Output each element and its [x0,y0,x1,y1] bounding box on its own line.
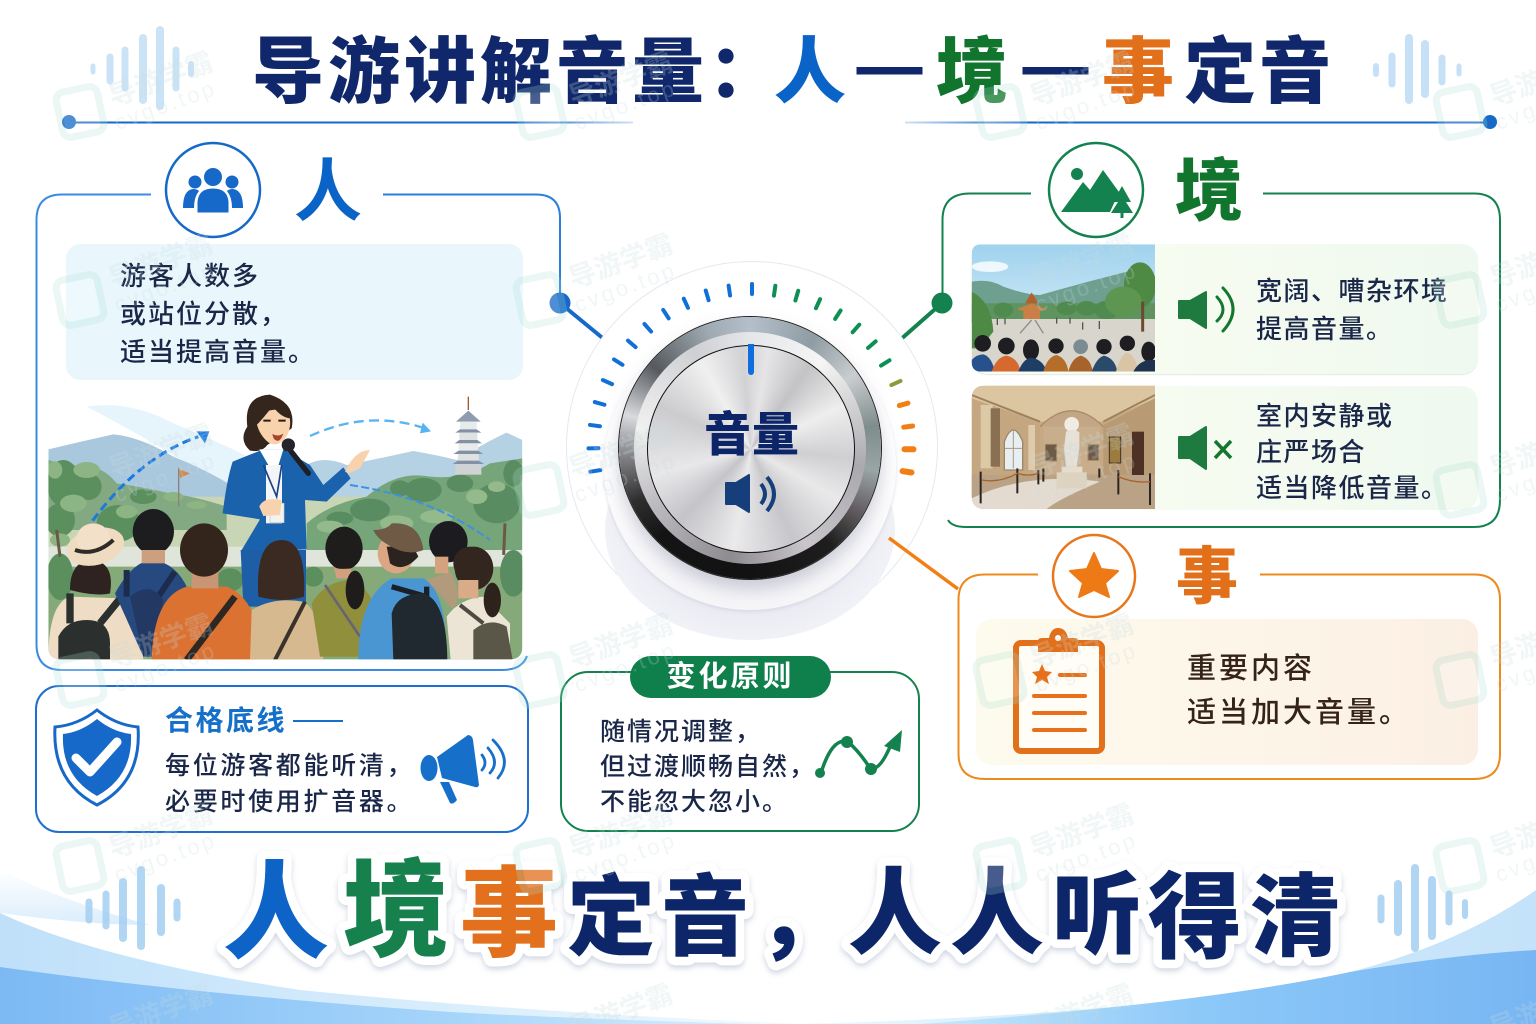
watermark: cvgo.top [571,827,680,887]
body text: 变化原则: 不能忽大忽小。 [600,788,789,816]
footer slogan: 定 [567,868,655,967]
watermark: 导游学霸 [105,609,217,674]
pagoda [453,397,484,475]
title [252,29,1334,113]
title: — [857,29,922,102]
knob inner ring [634,332,866,564]
dial: volume knob [566,261,938,640]
watermark: cvgo.top [571,75,680,135]
title: 导游讲解音量： [252,33,784,113]
panel: 合格底线 [35,685,529,833]
watermark: 导游学霸 [105,419,217,484]
footer slogan: 得 [1148,865,1242,970]
body text: 合格底线 [165,752,414,816]
watermark: 导游学霸 [1026,47,1138,112]
body text: 室内安静: 适当降低音量。 [1256,473,1449,503]
image: museum hall scene [972,386,1155,509]
footer slogan: 人 [848,861,942,966]
title: — [1023,29,1088,102]
icon: people group [164,142,262,238]
watermark: 导游学霸 [105,47,217,112]
footer slogan: 人 [950,861,1044,966]
knob label: 音量 [704,408,800,461]
heading: 合格底线: 合格底线 [165,705,287,736]
watermark: 导游学霸 [1026,229,1138,294]
icon: megaphone [420,735,506,804]
icon: knob speaker [725,474,776,513]
body text: 宽阔嘈杂环境: 宽阔、嘈杂环境 [1256,276,1449,306]
row card: 室内安静 [971,386,1478,510]
panel frame: 人 [36,194,603,671]
icon: star [1052,534,1136,618]
watermark: cvgo.top [111,827,220,887]
footer slogan: 听 [1052,866,1142,966]
watermark: 导游学霸 [565,229,677,294]
panel: 变化原则 [560,671,920,832]
dial far shadow [605,420,895,640]
body text: 人: 或站位分散， [120,299,288,329]
heading rule [293,720,343,722]
footer slogan: ， [757,868,845,967]
body text: 变化原则: 随情况调整， [600,718,762,746]
footer slogan: 境 [343,853,449,971]
body text: 宽阔嘈杂环境 [1256,276,1449,344]
watermark: cvgo.top [111,75,220,135]
panel frame: 境 [901,192,1501,528]
icon: mountains [1048,142,1144,238]
watermark: 导游学霸 [1026,419,1138,484]
dial near plate [604,322,896,610]
knob metal face [647,345,855,553]
dial halo [566,261,938,633]
icon: clipboard [1013,628,1105,754]
watermark: cvgo.top [1032,257,1141,317]
watermark: 导游学霸 [565,47,677,112]
panel frame: 事 [958,574,1501,780]
icon: speaker muted [1178,426,1232,470]
body text: 人: 适当提高音量。 [120,337,316,367]
body text: 人 [120,261,316,367]
body text: 人: 游客人数多 [120,261,260,291]
watermark: cvgo.top [1032,75,1141,135]
badge: 变化原则: 变化原则 [666,661,794,693]
watermark: cvgo.top [1032,637,1141,697]
heading: 人: 人 [294,154,362,230]
body text: 宽阔嘈杂环境: 提高音量。 [1256,314,1394,344]
guide [243,395,292,451]
body text: 室内安静: 庄严场合 [1256,437,1366,467]
watermark: 导游学霸 [1026,799,1138,864]
watermark: 导游学霸 [105,229,217,294]
tourists [48,597,143,660]
body text: 事 [1187,653,1411,729]
body text: 变化原则: 但过渡顺畅自然， [600,753,816,781]
title: 事 [1102,33,1174,113]
watermark: 导游学霸 [565,799,677,864]
body text: 室内安静: 室内安静或 [1256,401,1394,431]
footer slogan: 清 [1250,868,1340,968]
flag [178,467,180,507]
watermark: cvgo.top [111,447,220,507]
watermark: cvgo.top [111,257,220,317]
footer slogan: 音 [661,868,749,967]
image: open square scene [972,244,1155,372]
icon: trend line [815,730,902,778]
text card: 人 [66,244,523,380]
watermark: 导游学霸 [565,419,677,484]
illustration: guide and tourists [48,394,522,660]
body text: 事: 适当加大音量。 [1187,697,1411,729]
title: 人 [774,33,846,113]
watermark: cvgo.top [1032,827,1141,887]
watermark: cvgo.top [1032,447,1141,507]
footer slogan: 事 [460,859,558,969]
watermark: 导游学霸 [105,799,217,864]
dashed arrows [93,437,198,521]
panel: 境 [901,142,1501,528]
body text: 合格底线: 每位游客都能听清， [165,752,414,780]
watermark: cvgo.top [111,637,220,697]
knob outer ring [619,317,881,579]
text card: 事 [976,619,1478,765]
body text: 室内安静 [1256,401,1449,503]
watermark: cvgo.top [571,257,680,317]
title: 境 [936,33,1008,113]
row card: 宽阔嘈杂环境 [971,244,1478,374]
badge: 变化原则 [630,656,831,698]
footer slogan: 人 [223,855,329,973]
panel: 人 [36,142,603,671]
title: 定音 [1184,33,1334,113]
watermark: cvgo.top [571,637,680,697]
watermark: 导游学霸 [1026,609,1138,674]
watermark: cvgo.top [571,447,680,507]
body text: 事: 重要内容 [1187,653,1315,685]
heading: 事: 事 [1176,543,1238,612]
knob indicator [748,344,754,375]
heading: 境: 境 [1175,154,1243,230]
panel: 事 [958,534,1501,780]
icon: shield check [53,708,140,807]
icon: speaker loud [1178,286,1235,333]
watermark: 导游学霸 [565,609,677,674]
body text: 变化原则 [600,718,816,816]
body text: 合格底线: 必要时使用扩音器。 [165,788,414,816]
